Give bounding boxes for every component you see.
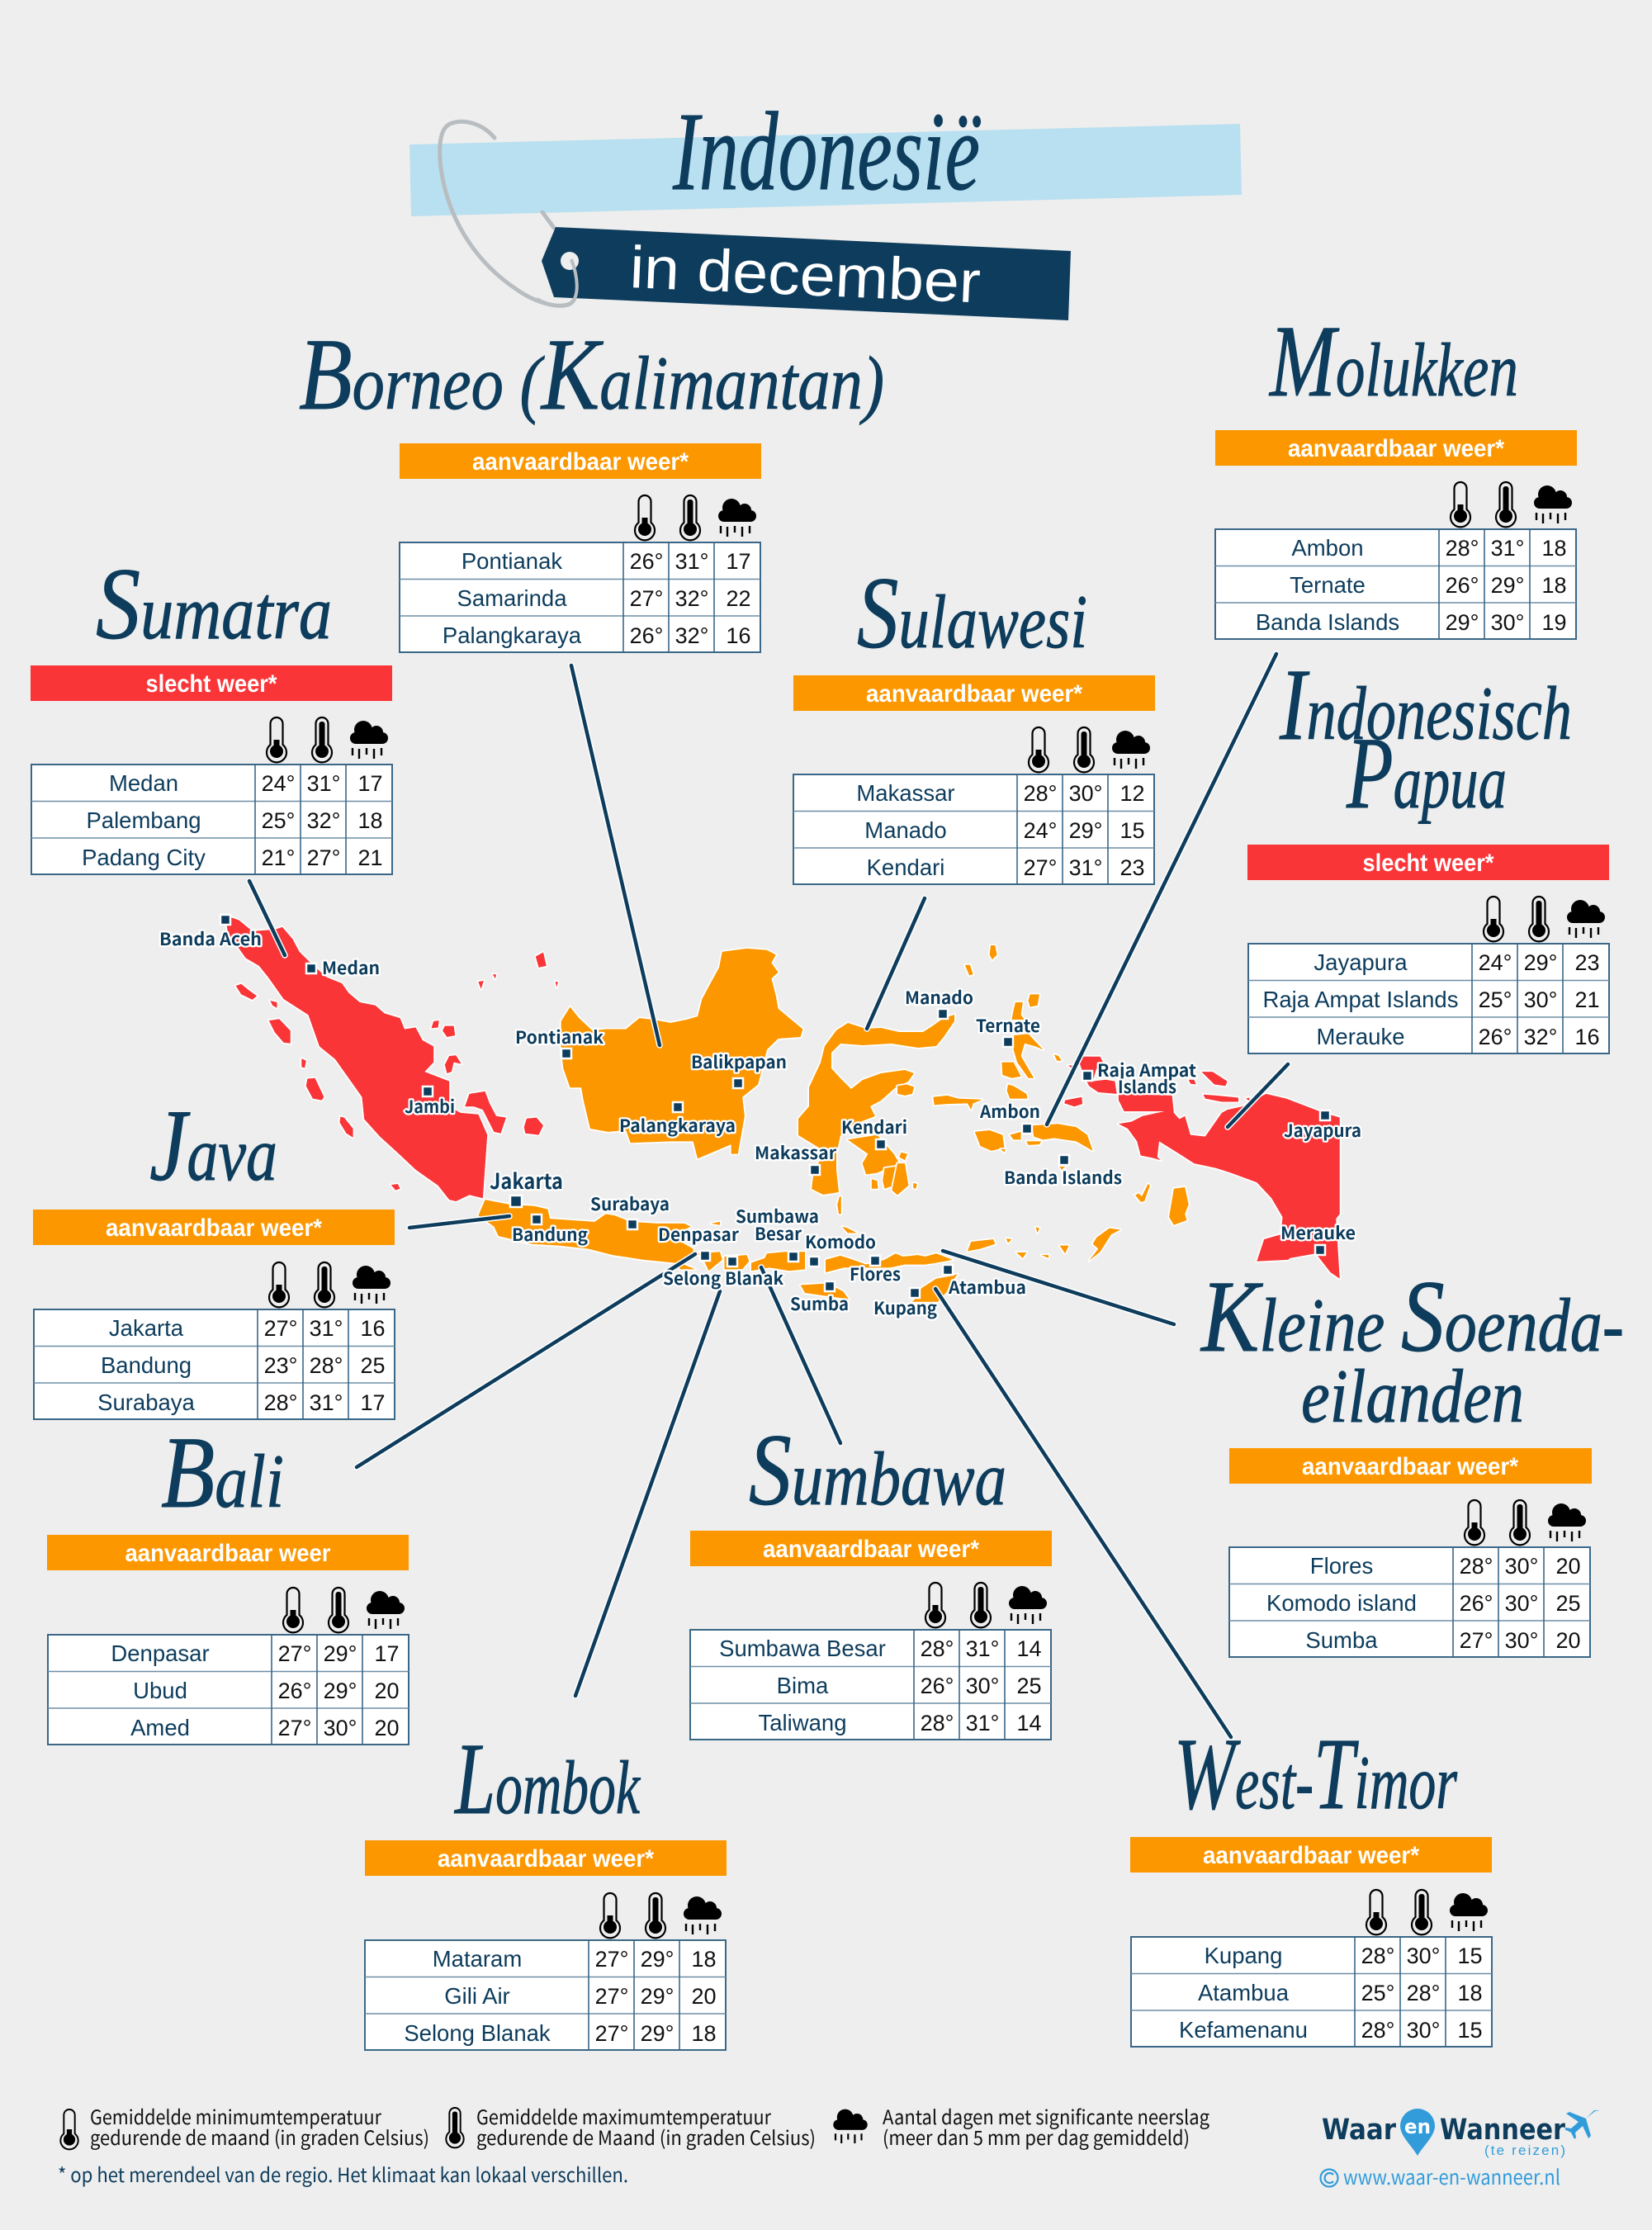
table: 28° bbox=[1361, 1944, 1394, 1968]
heading: Molukken bbox=[1268, 305, 1518, 418]
heading: Indonesisch bbox=[1279, 648, 1572, 761]
table: 30° bbox=[1069, 781, 1102, 806]
panel: Sulawesi bbox=[793, 556, 1155, 884]
weather banner bbox=[365, 1840, 727, 1876]
heading: Sulawesi bbox=[857, 556, 1087, 670]
city markers and labels: Palangkaraya bbox=[619, 1113, 736, 1138]
legend text maximum: Gemiddelde maximumtemperatuur bbox=[476, 2101, 772, 2130]
table: 25 bbox=[1555, 1591, 1581, 1616]
table: 27° bbox=[1024, 855, 1057, 880]
table: 17 bbox=[360, 1390, 386, 1415]
weather banner bbox=[47, 1535, 409, 1570]
table: 27° bbox=[1460, 1628, 1493, 1653]
table: 30° bbox=[1505, 1591, 1538, 1616]
city markers and labels: Besar bbox=[755, 1221, 802, 1246]
weather banner bbox=[1215, 430, 1577, 466]
table: 23 bbox=[1574, 950, 1600, 975]
table: Gili Air bbox=[444, 1983, 510, 2009]
table: 18 bbox=[691, 1947, 717, 1972]
table: 32° bbox=[675, 586, 708, 611]
table: Padang City bbox=[82, 845, 206, 870]
table: Jayapura bbox=[1314, 949, 1408, 975]
weather banner bbox=[1247, 845, 1609, 880]
table: 28° bbox=[1446, 536, 1479, 561]
icons bbox=[267, 717, 388, 762]
table: 21 bbox=[357, 845, 383, 870]
city markers and labels: Sumbawa bbox=[736, 1204, 819, 1229]
weather banner: aanvaardbaar weer* bbox=[1302, 1453, 1518, 1480]
panel: Borneo (Kalimantan) bbox=[299, 318, 884, 652]
table: 15 bbox=[1457, 1944, 1483, 1968]
table: 30° bbox=[966, 1674, 999, 1698]
table: 21 bbox=[1574, 987, 1600, 1012]
table bbox=[48, 1635, 409, 1745]
table: 30° bbox=[324, 1716, 357, 1740]
city markers and labels: Makassar bbox=[755, 1140, 837, 1165]
table: Taliwang bbox=[758, 1710, 847, 1735]
table: 31° bbox=[966, 1636, 999, 1661]
table: 23° bbox=[264, 1353, 297, 1378]
weather banner bbox=[793, 675, 1155, 711]
Kalimantan and Java region (orange) bbox=[478, 949, 849, 1300]
table: 25 bbox=[360, 1353, 386, 1378]
heading: Bali bbox=[161, 1416, 284, 1529]
table: 22 bbox=[726, 586, 751, 611]
panel: Sumbawa bbox=[690, 1413, 1052, 1740]
icons bbox=[600, 1893, 722, 1938]
panel: Kleine Soenda-eilanden bbox=[1200, 1260, 1624, 1657]
weather banner: aanvaardbaar weer* bbox=[438, 1845, 654, 1873]
table: 32° bbox=[307, 808, 340, 833]
table: 31° bbox=[966, 1711, 999, 1735]
city markers and labels: Banda Aceh bbox=[159, 926, 262, 951]
table: 30° bbox=[1407, 2018, 1440, 2043]
table: Atambua bbox=[1198, 1980, 1290, 2005]
table: 27° bbox=[630, 586, 663, 611]
table: Bandung bbox=[101, 1352, 192, 1378]
table: 30° bbox=[1491, 610, 1524, 635]
city markers and labels: Medan bbox=[322, 955, 380, 980]
table: Makassar bbox=[856, 780, 955, 806]
table: 18 bbox=[1541, 573, 1567, 598]
city markers and labels: Surabaya bbox=[590, 1191, 670, 1216]
city markers and labels bbox=[159, 915, 1361, 1320]
logo wordmark left: Waar bbox=[1322, 2114, 1397, 2147]
table: Medan bbox=[109, 770, 178, 796]
panel: Molukken bbox=[1215, 305, 1577, 639]
table: Amed bbox=[130, 1715, 190, 1740]
city markers and labels: Pontianak bbox=[515, 1025, 604, 1049]
weather banner: aanvaardbaar weer* bbox=[1203, 1842, 1419, 1869]
table: 27° bbox=[307, 845, 340, 870]
title block bbox=[409, 90, 1242, 320]
table: 24° bbox=[1479, 950, 1512, 975]
table: 31° bbox=[675, 549, 708, 574]
tagline: (te reizen) bbox=[1484, 2142, 1565, 2158]
table: 30° bbox=[1505, 1554, 1538, 1579]
table bbox=[793, 774, 1154, 884]
icons bbox=[635, 495, 756, 540]
table: 15 bbox=[1457, 2018, 1483, 2043]
icon: minimum temperature bbox=[60, 2109, 78, 2149]
heading: Kleine Soenda- bbox=[1200, 1260, 1624, 1373]
table: 28° bbox=[310, 1353, 343, 1378]
icon: airplane bbox=[1564, 2110, 1600, 2139]
table: 28° bbox=[264, 1390, 297, 1415]
table: Ambon bbox=[1291, 535, 1364, 561]
heading: Lombok bbox=[454, 1722, 641, 1835]
panel: West-Timor bbox=[1130, 1717, 1492, 2047]
table: Denpasar bbox=[111, 1641, 210, 1666]
table: 19 bbox=[1541, 610, 1567, 635]
logo bbox=[1321, 2109, 1600, 2191]
icon: copyright bbox=[1321, 2170, 1337, 2186]
Sulawesi (orange) bbox=[798, 1015, 954, 1195]
main title: Indonesië bbox=[672, 90, 981, 214]
table: 29° bbox=[1524, 950, 1557, 975]
table: 28° bbox=[1460, 1554, 1493, 1579]
table: 29° bbox=[1069, 818, 1102, 843]
table: 26° bbox=[1479, 1025, 1512, 1049]
legend text minimum: gedurende de maand (in graden Celsius) bbox=[90, 2122, 429, 2151]
table: 17 bbox=[357, 771, 383, 796]
table: 28° bbox=[921, 1711, 954, 1735]
table: Palembang bbox=[86, 807, 201, 833]
string front bbox=[537, 259, 577, 305]
table: Banda Islands bbox=[1256, 609, 1399, 635]
table: 12 bbox=[1119, 781, 1145, 806]
table: Manado bbox=[864, 817, 947, 843]
weather banner: aanvaardbaar weer* bbox=[866, 680, 1082, 708]
city markers and labels: Balikpapan bbox=[691, 1049, 787, 1074]
table: Ubud bbox=[133, 1678, 187, 1703]
heading second line: Papua bbox=[1346, 717, 1507, 830]
table: 21° bbox=[262, 845, 295, 870]
table: 14 bbox=[1016, 1711, 1042, 1735]
table: 29° bbox=[324, 1641, 357, 1666]
table bbox=[1131, 1937, 1492, 2047]
table: 25° bbox=[1479, 987, 1512, 1012]
table: 26° bbox=[278, 1678, 311, 1703]
legend text minimum bbox=[90, 2101, 429, 2151]
pin text: en bbox=[1404, 2115, 1431, 2138]
table: Ternate bbox=[1290, 572, 1366, 598]
city markers and labels: Ambon bbox=[979, 1099, 1040, 1124]
weather banner bbox=[33, 1210, 395, 1245]
table: Palangkaraya bbox=[443, 623, 582, 648]
table: 25° bbox=[1361, 1981, 1394, 2005]
table: 29° bbox=[1491, 573, 1524, 598]
city markers and labels: Komodo bbox=[805, 1229, 876, 1254]
table: 29° bbox=[641, 1947, 674, 1972]
table: 28° bbox=[1361, 2018, 1394, 2043]
heading: Java bbox=[149, 1089, 277, 1202]
table: 15 bbox=[1119, 818, 1145, 843]
table: Surabaya bbox=[97, 1390, 196, 1415]
table: 26° bbox=[921, 1674, 954, 1698]
table: Kendari bbox=[867, 855, 944, 880]
weather banner bbox=[400, 443, 761, 479]
table: 17 bbox=[374, 1641, 400, 1666]
tag string back bbox=[440, 121, 577, 305]
table bbox=[34, 1309, 395, 1419]
table: 27° bbox=[278, 1716, 311, 1740]
table: 32° bbox=[675, 623, 708, 648]
table: 24° bbox=[262, 771, 295, 796]
legend text maximum bbox=[476, 2101, 816, 2151]
table: 16 bbox=[726, 623, 751, 648]
weather banner bbox=[31, 665, 392, 701]
table: 18 bbox=[357, 808, 383, 833]
weather banner: slecht weer* bbox=[145, 670, 277, 698]
table bbox=[1215, 529, 1576, 639]
table: 31° bbox=[1069, 855, 1102, 880]
table: 20 bbox=[1555, 1628, 1581, 1653]
heading: Sumbawa bbox=[749, 1413, 1006, 1527]
table: Merauke bbox=[1316, 1024, 1405, 1049]
weather banner: slecht weer* bbox=[1362, 850, 1494, 877]
heading: Borneo (Kalimantan) bbox=[299, 318, 884, 431]
panel: Bali bbox=[47, 1416, 409, 1745]
icon: map pin bbox=[1400, 2109, 1435, 2156]
icons bbox=[283, 1588, 405, 1632]
panel: Sumatra bbox=[31, 547, 392, 874]
city markers and labels: Merauke bbox=[1280, 1220, 1356, 1245]
table: 20 bbox=[374, 1716, 400, 1740]
table: 28° bbox=[1024, 781, 1057, 806]
table: 17 bbox=[726, 549, 751, 574]
table: 31° bbox=[310, 1390, 343, 1415]
table: 23 bbox=[1119, 855, 1145, 880]
city markers and labels: Bandung bbox=[512, 1222, 588, 1247]
city markers and labels: Manado bbox=[905, 985, 973, 1010]
table bbox=[365, 1940, 726, 2050]
table: 30° bbox=[1505, 1628, 1538, 1653]
table bbox=[690, 1630, 1051, 1740]
table: 14 bbox=[1016, 1636, 1042, 1661]
table: 30° bbox=[1407, 1944, 1440, 1968]
table: 32° bbox=[1524, 1025, 1557, 1049]
table: 20 bbox=[691, 1984, 717, 2009]
icons bbox=[1029, 727, 1150, 772]
weather banner: aanvaardbaar weer bbox=[125, 1540, 331, 1567]
subtitle: in december bbox=[628, 234, 982, 316]
city markers and labels: Banda Islands bbox=[1004, 1165, 1122, 1190]
table: 28° bbox=[921, 1636, 954, 1661]
map of Indonesia bbox=[225, 916, 1340, 1302]
table: 26° bbox=[630, 549, 663, 574]
table: 29° bbox=[324, 1678, 357, 1703]
icons bbox=[1484, 897, 1605, 941]
table: 16 bbox=[1574, 1025, 1600, 1049]
title band bbox=[409, 124, 1242, 216]
icon: maximum temperature bbox=[446, 2108, 464, 2147]
city markers and labels: Ternate bbox=[976, 1013, 1040, 1038]
leader lines bbox=[249, 654, 1288, 1737]
table: Pontianak bbox=[462, 548, 562, 574]
table: Kupang bbox=[1205, 1943, 1282, 1968]
weather banner bbox=[1130, 1837, 1492, 1873]
table: 24° bbox=[1024, 818, 1057, 843]
table: Jakarta bbox=[109, 1315, 184, 1341]
weather banner: aanvaardbaar weer* bbox=[106, 1214, 322, 1242]
eastern islands (orange) bbox=[826, 945, 1189, 1302]
icons bbox=[925, 1583, 1047, 1627]
icons bbox=[1451, 482, 1572, 527]
table: Selong Blanak bbox=[404, 2020, 551, 2046]
city markers and labels: Denpasar bbox=[658, 1222, 740, 1247]
table: 18 bbox=[691, 2021, 717, 2046]
weather banner: aanvaardbaar weer* bbox=[472, 448, 689, 476]
table: 27° bbox=[595, 2021, 628, 2046]
legend text rain: (meer dan 5 mm per dag gemiddeld) bbox=[883, 2122, 1190, 2151]
icons bbox=[1366, 1890, 1488, 1934]
table: 20 bbox=[374, 1678, 400, 1703]
table: 29° bbox=[641, 2021, 674, 2046]
table: Bima bbox=[777, 1673, 829, 1698]
table: 28° bbox=[1407, 1981, 1440, 2005]
legend bbox=[60, 2101, 1209, 2151]
table: 27° bbox=[264, 1316, 297, 1341]
city markers and labels: Raja Ampat bbox=[1097, 1058, 1196, 1082]
table: Sumba bbox=[1305, 1627, 1378, 1653]
legend text rain: Aantal dagen met significante neerslag bbox=[883, 2101, 1209, 2130]
heading: West-Timor bbox=[1174, 1717, 1458, 1830]
table: Raja Ampat Islands bbox=[1263, 987, 1458, 1012]
footnote: * op het merendeel van de regio. Het klimaat kan lokaal verschillen. bbox=[58, 2159, 628, 2188]
city markers and labels: Selong Blanak bbox=[663, 1266, 783, 1290]
legend text minimum: Gemiddelde minimumtemperatuur bbox=[90, 2101, 382, 2130]
table: 31° bbox=[310, 1316, 343, 1341]
Sumatra region (red) bbox=[225, 916, 558, 1201]
tag hole bbox=[561, 252, 579, 270]
legend text rain bbox=[883, 2101, 1209, 2151]
city markers and labels: Kupang bbox=[873, 1295, 937, 1320]
table: Sumbawa Besar bbox=[719, 1636, 886, 1661]
panel: Java bbox=[33, 1089, 395, 1419]
table: Flores bbox=[1310, 1553, 1373, 1579]
table: 27° bbox=[595, 1984, 628, 2009]
icons bbox=[1465, 1500, 1586, 1545]
table: Samarinda bbox=[457, 585, 567, 611]
table: 26° bbox=[1460, 1591, 1493, 1616]
city markers and labels: Jakarta bbox=[490, 1165, 563, 1195]
icons bbox=[269, 1262, 391, 1307]
city markers and labels: Sumba bbox=[790, 1291, 849, 1316]
table: 18 bbox=[1541, 536, 1567, 561]
city markers and labels: Flores bbox=[850, 1262, 901, 1286]
table: 27° bbox=[278, 1641, 311, 1666]
Papua region (red) bbox=[1064, 1057, 1340, 1279]
table: 29° bbox=[1446, 610, 1479, 635]
panel: Lombok bbox=[365, 1722, 727, 2050]
table bbox=[31, 765, 392, 874]
table: Mataram bbox=[433, 1946, 522, 1972]
weather banner bbox=[1229, 1448, 1592, 1484]
city markers and labels: Jambi bbox=[405, 1094, 455, 1119]
website: www.waar-en-wanneer.nl bbox=[1343, 2161, 1560, 2191]
table bbox=[1229, 1547, 1590, 1657]
weather banner: aanvaardbaar weer* bbox=[763, 1536, 979, 1563]
table: Kefamenanu bbox=[1179, 2017, 1308, 2043]
weather banner: aanvaardbaar weer* bbox=[1288, 435, 1504, 462]
legend text maximum: gedurende de Maand (in graden Celsius) bbox=[476, 2122, 816, 2151]
dark tag bbox=[542, 227, 1071, 320]
city markers and labels: Kendari bbox=[841, 1115, 907, 1139]
logo wordmark right: Wanneer bbox=[1440, 2114, 1566, 2147]
city markers and labels: Islands bbox=[1118, 1074, 1176, 1099]
table: 30° bbox=[1524, 987, 1557, 1012]
table: 26° bbox=[1446, 573, 1479, 598]
table: 25 bbox=[1016, 1674, 1042, 1698]
heading: Sumatra bbox=[96, 547, 332, 660]
table: 25° bbox=[262, 808, 295, 833]
weather banner bbox=[690, 1531, 1052, 1566]
city markers and labels: Jayapura bbox=[1284, 1118, 1361, 1143]
table: 20 bbox=[1555, 1554, 1581, 1579]
table: 31° bbox=[1491, 536, 1524, 561]
table: 26° bbox=[630, 623, 663, 648]
table: 29° bbox=[641, 1984, 674, 2009]
city markers and labels: Atambua bbox=[948, 1275, 1026, 1300]
table: 18 bbox=[1457, 1981, 1483, 2005]
table: 27° bbox=[595, 1947, 628, 1972]
heading second line: eilanden bbox=[1301, 1354, 1524, 1438]
table bbox=[400, 542, 760, 652]
table bbox=[1248, 944, 1609, 1053]
table: Komodo island bbox=[1266, 1590, 1417, 1616]
icon: rain cloud bbox=[833, 2109, 868, 2143]
table: 16 bbox=[360, 1316, 386, 1341]
table: 31° bbox=[307, 771, 340, 796]
panel: Indonesisch Papua bbox=[1247, 648, 1609, 1053]
